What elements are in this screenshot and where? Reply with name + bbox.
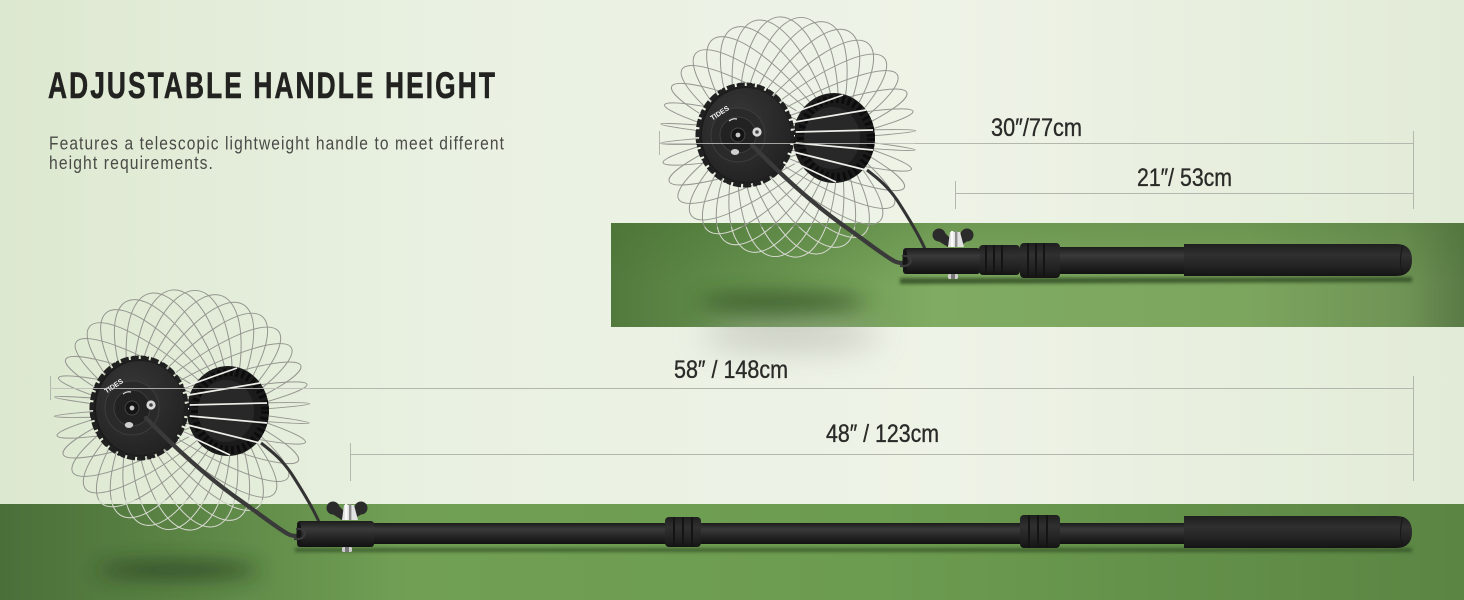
panel: lower green surface xyxy=(0,504,1464,600)
dimension line: 58 inch xyxy=(50,376,1414,481)
upper telescopic handle (retracted) xyxy=(979,243,1412,278)
shadow beneath upper panel xyxy=(700,321,880,349)
lower wire roller head with clamp xyxy=(51,279,374,552)
description text xyxy=(49,132,505,173)
shadow: upper tool on surface xyxy=(698,277,1412,311)
label: 58 inch: 58″ / 148cm xyxy=(674,356,788,384)
lower telescopic handle (extended) xyxy=(365,515,1412,548)
upper wire roller head with clamp xyxy=(657,6,980,279)
label: 30 inch: 30″/77cm xyxy=(991,114,1082,142)
dimension line: 30 inch xyxy=(660,131,1414,209)
description text: height requirements. xyxy=(49,152,214,173)
dimension line overlay on lower head xyxy=(50,388,310,390)
label: 48 inch: 48″ / 123cm xyxy=(826,420,939,448)
dimension line: 48 inch xyxy=(350,443,1413,481)
description text: Features a telescopic lightweight handle to meet different xyxy=(49,132,505,154)
shadow: lower tool on surface xyxy=(96,548,1412,578)
title: ADJUSTABLE HANDLE HEIGHT xyxy=(48,64,497,106)
panel: upper green surface xyxy=(611,223,1464,327)
dimension line overlay on upper head xyxy=(660,142,915,144)
label: 21 inch: 21″/ 53cm xyxy=(1137,164,1232,192)
dimension line: 21 inch xyxy=(955,181,1413,209)
